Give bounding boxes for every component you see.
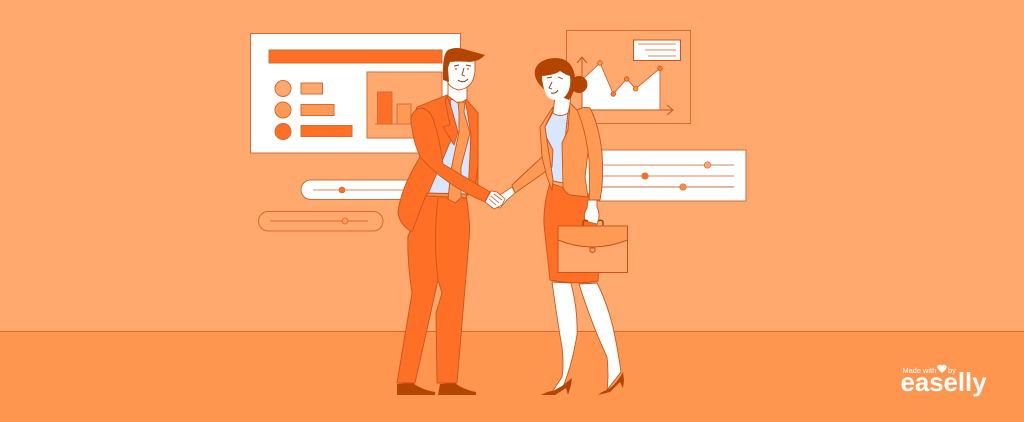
woman skirt	[544, 183, 600, 283]
man tie	[448, 102, 470, 203]
floor	[0, 331, 1024, 422]
icon: heart	[937, 365, 947, 373]
woman face	[542, 71, 570, 100]
woman shirt	[545, 112, 568, 183]
woman legs	[552, 282, 577, 392]
woman hair	[535, 58, 575, 100]
panel: left presentation board	[250, 34, 460, 153]
wall background	[0, 0, 1024, 331]
woman bun	[570, 76, 588, 93]
man jacket right band	[465, 98, 478, 193]
man shirt	[428, 97, 471, 194]
woman jacket front	[562, 103, 590, 197]
man face details	[454, 65, 471, 82]
man hair	[443, 48, 485, 82]
man lapel	[443, 96, 458, 145]
area chart	[582, 63, 660, 110]
slider pill one	[301, 180, 431, 200]
woman neck	[553, 93, 571, 116]
man shoes	[397, 383, 476, 395]
logo: easelly: by	[948, 366, 956, 375]
woman hand holding case	[584, 200, 599, 224]
man arm	[411, 108, 490, 202]
bar chart	[367, 72, 442, 138]
slider pill two	[258, 212, 383, 231]
panel: line chart frame	[566, 30, 690, 124]
logo: easelly: Made with	[902, 366, 936, 375]
panel: right sliders	[584, 150, 746, 201]
logo: easelly: easelly	[900, 369, 987, 397]
woman left arm	[512, 127, 553, 193]
note card	[634, 40, 680, 60]
briefcase	[558, 220, 628, 272]
woman sleeve	[577, 107, 603, 200]
man figure	[397, 48, 490, 395]
woman figure	[512, 58, 624, 395]
man neck	[448, 83, 467, 104]
man waistband	[427, 193, 467, 198]
handshake	[485, 187, 515, 209]
woman jacket left	[540, 107, 553, 190]
man jacket body	[398, 95, 478, 232]
man head	[445, 60, 475, 90]
woman shoes	[541, 372, 624, 395]
man trousers	[397, 195, 470, 383]
